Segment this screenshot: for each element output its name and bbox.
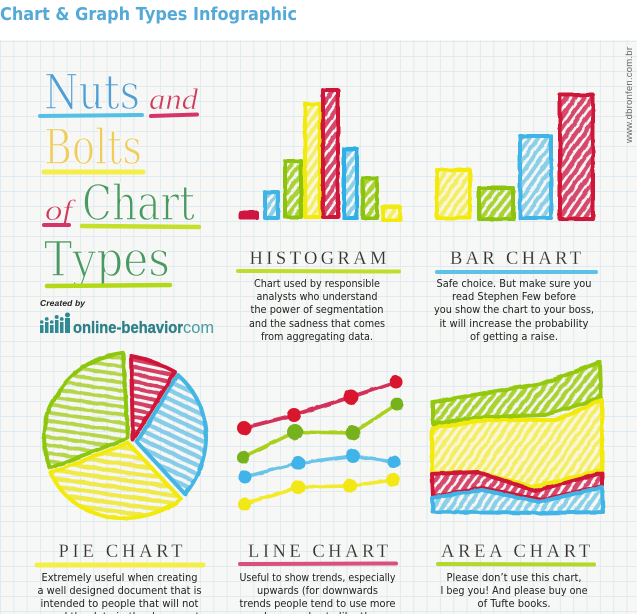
area band: red: [432, 472, 602, 500]
area chart description: I beg you! And please buy one: [440, 585, 588, 597]
pie chart: [44, 353, 206, 518]
histogram description: Chart used by responsible: [254, 278, 380, 290]
area chart description: Please don’t use this chart,: [446, 572, 582, 584]
line chart description: upwards (for downwards: [257, 585, 378, 597]
histogram chart: [240, 90, 400, 220]
logo wordmark: online-behavior: [73, 318, 183, 337]
logo: online-behavior: [40, 312, 214, 337]
line chart description: Useful to show trends, especially: [240, 572, 396, 584]
histogram description: the power of segmentation: [250, 304, 384, 316]
bar chart description: read Stephen Few before: [452, 291, 576, 303]
credit: created by: Created by: [40, 298, 86, 308]
watermark: www.dbronfen.com.br: [624, 47, 635, 144]
bar chart description: you show the chart to your boss,: [434, 304, 594, 316]
pie slice: yellow: [51, 443, 181, 518]
title word: of: of: [45, 194, 76, 227]
line chart description: trends people tend to use more: [240, 598, 396, 610]
underline: Nuts: [40, 115, 142, 116]
main title: [40, 64, 199, 288]
histogram description: from aggregating data.: [261, 331, 373, 343]
pie slice: green: [44, 353, 128, 468]
title word: and: and: [149, 83, 199, 116]
underline: of: [44, 223, 69, 227]
pie chart underline: [37, 562, 203, 568]
bar chart underline: [437, 270, 596, 274]
line chart description: [240, 572, 396, 614]
series: yellow line: [238, 473, 400, 510]
histogram heading: HISTOGRAM: [250, 249, 386, 269]
page heading: Chart & Graph Types Infographic: [0, 5, 297, 25]
pie chart description: a well designed document that is: [38, 585, 202, 597]
area band: yellow: [432, 400, 602, 487]
histogram description: analysts who understand: [256, 291, 378, 303]
underline: Chart: [82, 226, 199, 227]
title word: Types: Types: [44, 231, 170, 288]
area chart description: of Tufte books.: [478, 598, 550, 610]
area chart underline: [438, 562, 594, 566]
title word: Nuts: Nuts: [44, 64, 140, 121]
series: red line: [237, 376, 402, 435]
pie slice: blue: [137, 375, 206, 494]
histogram description: [249, 278, 385, 343]
area chart description: [440, 572, 588, 610]
bar chart description: Safe choice. But make sure you: [436, 278, 592, 290]
histogram underline: [238, 269, 399, 274]
series: blue line: [238, 449, 400, 484]
pie chart heading: PIE CHART: [58, 542, 182, 562]
area chart: [432, 362, 603, 513]
underline: Bolts: [44, 170, 143, 174]
bar chart: [437, 95, 593, 219]
bar chart heading: BAR CHART: [450, 249, 581, 269]
pie slice: red: [131, 356, 175, 440]
line chart heading: LINE CHART: [248, 542, 388, 562]
area band: green: [433, 362, 601, 424]
pie chart description: intended to people that will not: [40, 598, 198, 610]
pie chart description: [38, 572, 202, 614]
bar chart description: [434, 278, 594, 343]
underline: Types: [47, 285, 170, 286]
histogram description: and the sadness that comes: [249, 318, 385, 330]
series: green line: [236, 398, 404, 464]
area chart heading: AREA CHART: [441, 542, 590, 562]
logo suffix: com: [183, 318, 214, 337]
icon: logo bars: [40, 312, 70, 333]
title word: Chart: Chart: [82, 175, 195, 232]
bar chart description: it will increase the probability: [440, 318, 588, 330]
underline: and: [151, 114, 197, 116]
line chart underline: [240, 562, 396, 566]
title word: Bolts: Bolts: [44, 119, 142, 176]
pie chart description: Extremely useful when creating: [42, 572, 198, 584]
bar chart description: of getting a raise.: [470, 331, 558, 343]
line chart: [236, 376, 404, 510]
area band: blue: [432, 487, 603, 513]
